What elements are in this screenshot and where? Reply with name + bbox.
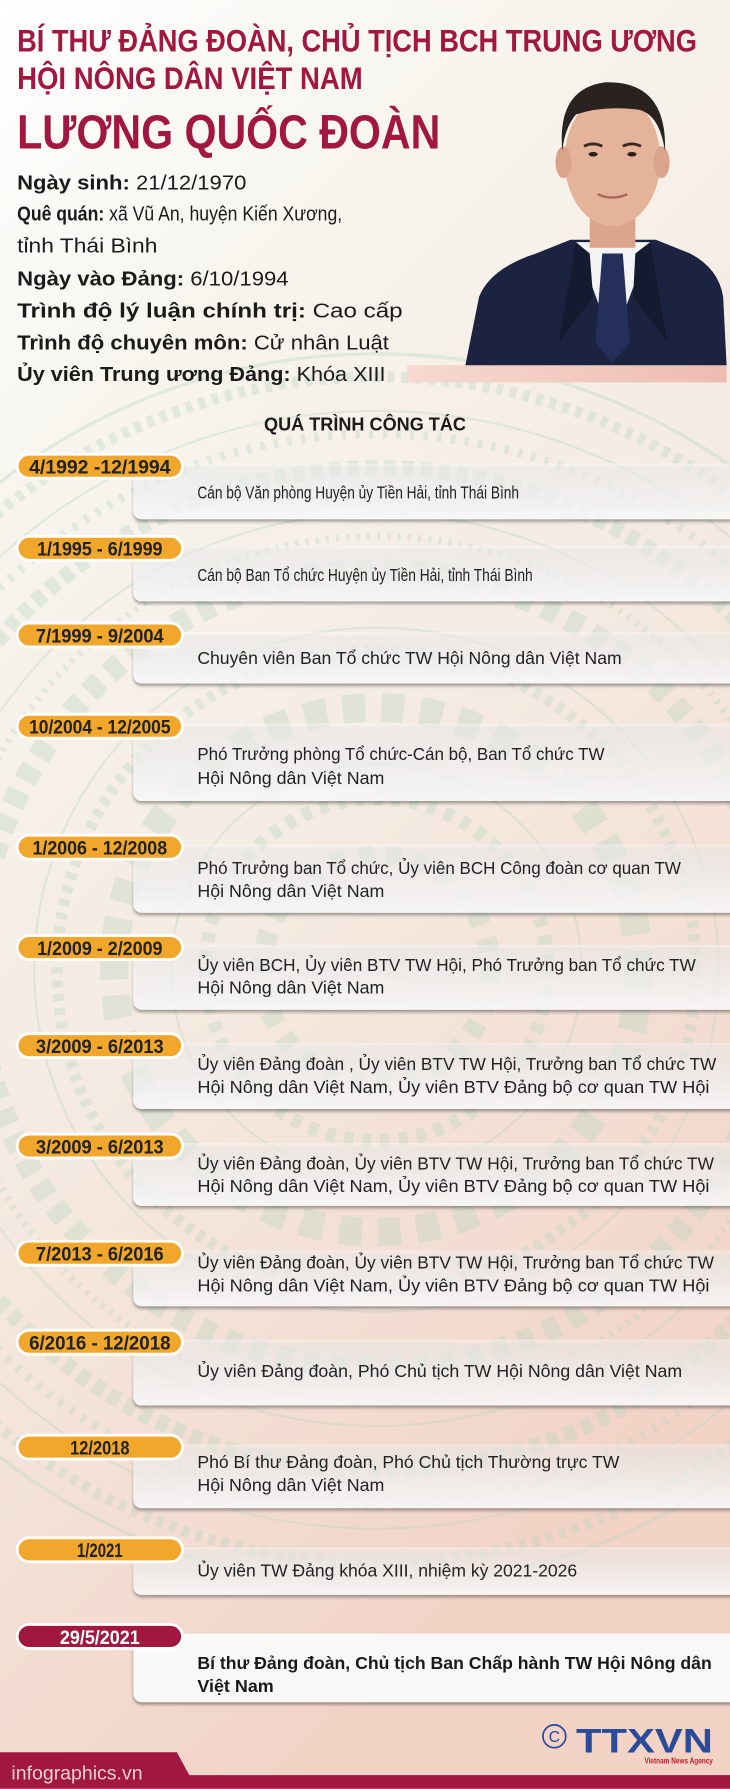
timeline entry 10: 6/2016 - 12/2018	[29, 1333, 171, 1355]
timeline entry 10	[17, 1330, 730, 1406]
info block: Ủy viên Trung ương Đảng: Khóa XIII	[17, 362, 386, 386]
title: HỘI NÔNG DÂN VIỆT NAM	[17, 60, 363, 96]
timeline entry 4	[17, 714, 730, 801]
footer	[0, 1752, 730, 1789]
info block: Ngày vào Đảng: 6/10/1994	[17, 267, 289, 290]
timeline entry 12	[17, 1538, 730, 1595]
timeline entry 3: 7/1999 - 9/2004	[36, 625, 164, 647]
info block: Ngày sinh: 21/12/1970	[17, 172, 246, 195]
timeline entry 2: Cán bộ Ban Tổ chức Huyện ủy Tiền Hải, tỉnh Thái Bình	[197, 566, 533, 585]
timeline entry 13 (highlight): Bí thư Đảng đoàn, Chủ tịch Ban Chấp hành TW Hội Nông dân	[197, 1654, 712, 1673]
timeline entry 5	[17, 835, 730, 913]
timeline entry 7: Hội Nông dân Việt Nam, Ủy viên BTV Đảng bộ cơ quan TW Hội	[197, 1078, 709, 1097]
timeline entry 9: 7/2013 - 6/2016	[36, 1244, 164, 1266]
timeline entry 11: Phó Bí thư Đảng đoàn, Phó Chủ tịch Thường trực TW	[197, 1453, 620, 1472]
timeline entry 3: Chuyên viên Ban Tổ chức TW Hội Nông dân Việt Nam	[197, 649, 622, 668]
title: LƯƠNG QUỐC ĐOÀN	[17, 105, 440, 160]
section heading: QUÁ TRÌNH CÔNG TÁC	[264, 413, 466, 434]
timeline entry 5: 1/2006 - 12/2008	[33, 838, 167, 860]
timeline entry 8: Hội Nông dân Việt Nam, Ủy viên BTV Đảng bộ cơ quan TW Hội	[197, 1177, 709, 1196]
timeline entry 13 (highlight): Việt Nam	[197, 1677, 274, 1696]
timeline entry 1	[17, 454, 730, 519]
timeline entry 13 (highlight)	[17, 1624, 730, 1702]
timeline entry 4: 10/2004 - 12/2005	[29, 717, 171, 739]
timeline entry 9	[17, 1241, 730, 1306]
timeline entry 8: 3/2009 - 6/2013	[36, 1136, 164, 1158]
info block: tỉnh Thái Bình	[17, 234, 157, 257]
info block: Trình độ chuyên môn: Cử nhân Luật	[17, 331, 389, 354]
timeline entry 5: Phó Trưởng ban Tổ chức, Ủy viên BCH Công đoàn cơ quan TW	[197, 859, 682, 878]
timeline entry 7: Ủy viên Đảng đoàn , Ủy viên BTV TW Hội, Trưởng ban Tổ chức TW	[197, 1055, 717, 1074]
timeline entry 13 (highlight): 29/5/2021	[60, 1627, 140, 1649]
info block	[17, 172, 403, 386]
timeline entry 4: Hội Nông dân Việt Nam	[197, 769, 384, 788]
timeline entry 8	[17, 1134, 730, 1206]
logo: TTXVN: C	[549, 1729, 560, 1746]
timeline entry 1: 4/1992 -12/1994	[29, 457, 171, 479]
logo: TTXVN: Vietnam News Agency	[644, 1757, 713, 1766]
timeline entry 8: Ủy viên Đảng đoàn, Ủy viên BTV TW Hội, Trưởng ban Tổ chức TW	[197, 1154, 715, 1173]
timeline entry 7	[17, 1034, 730, 1109]
timeline entry 11: 12/2018	[70, 1438, 130, 1460]
footer: infographics.vn	[11, 1763, 143, 1785]
timeline entry 1: Cán bộ Văn phòng Huyện ủy Tiền Hải, tỉnh Thái Bình	[197, 484, 519, 503]
timeline entry 9: Hội Nông dân Việt Nam, Ủy viên BTV Đảng bộ cơ quan TW Hội	[197, 1276, 709, 1295]
timeline entry 10: Ủy viên Đảng đoàn, Phó Chủ tịch TW Hội Nông dân Việt Nam	[197, 1362, 682, 1381]
title	[17, 23, 697, 160]
timeline entry 11: Hội Nông dân Việt Nam	[197, 1476, 384, 1495]
info block: Quê quán: xã Vũ An, huyện Kiến Xương,	[17, 202, 342, 225]
logo: TTXVN	[543, 1722, 713, 1766]
timeline entry 3	[17, 623, 730, 683]
timeline entry 9: Ủy viên Đảng đoàn, Ủy viên BTV TW Hội, Trưởng ban Tổ chức TW	[197, 1254, 715, 1273]
timeline entry 12: 1/2021	[77, 1540, 123, 1562]
timeline entry 12: Ủy viên TW Đảng khóa XIII, nhiệm kỳ 2021-2026	[197, 1562, 577, 1581]
timeline entry 6: Hội Nông dân Việt Nam	[197, 979, 384, 998]
portrait photo	[407, 82, 727, 382]
timeline entry 7: 3/2009 - 6/2013	[36, 1036, 164, 1058]
timeline entry 11	[17, 1435, 730, 1508]
timeline entry 5: Hội Nông dân Việt Nam	[197, 882, 384, 901]
timeline entry 4: Phó Trưởng phòng Tổ chức-Cán bộ, Ban Tổ chức TW	[197, 745, 605, 764]
timeline entry 2	[17, 536, 730, 601]
timeline entry 6: Ủy viên BCH, Ủy viên BTV TW Hội, Phó Trưởng ban Tổ chức TW	[197, 956, 697, 975]
timeline entry 2: 1/1995 - 6/1999	[37, 539, 163, 561]
info block: Trình độ lý luận chính trị: Cao cấp	[17, 299, 403, 322]
logo: TTXVN: TTXVN	[576, 1722, 713, 1760]
timeline entry 6: 1/2009 - 2/2009	[37, 938, 163, 960]
timeline entry 6	[17, 936, 730, 1010]
